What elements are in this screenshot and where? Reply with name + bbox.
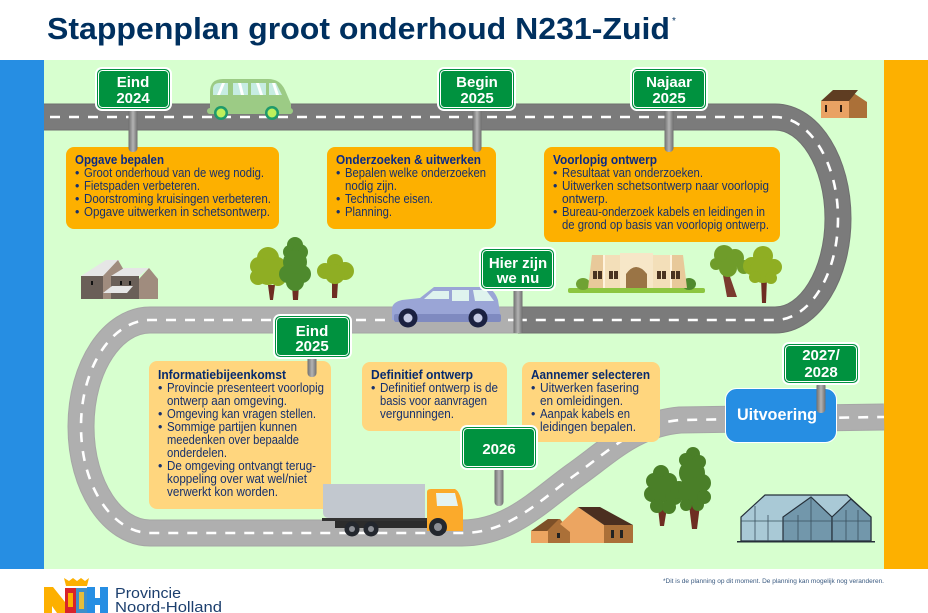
sign: najaar 2025: Najaar: [646, 74, 692, 91]
bullet list: de grond op basis van voorlopig ontwerp.: [562, 218, 769, 232]
pole: begin 2025: [472, 108, 482, 152]
sign: hier zijn we nu: [479, 247, 556, 291]
heading: Onderzoeken & uitwerken: [336, 153, 481, 167]
icon: greenhouse: [737, 495, 875, 542]
bullet list: •: [75, 179, 79, 193]
panel: uitvoering: [726, 388, 836, 442]
panel: opgave bepalen: [66, 147, 279, 229]
bullet list: basis voor aanvragen: [380, 394, 487, 408]
heading: Voorlopig ontwerp: [553, 153, 657, 167]
bullet list: [158, 381, 324, 499]
title: *: [672, 16, 676, 27]
bullet list: vergunningen.: [380, 407, 454, 421]
bullet list: De omgeving ontvangt terug-: [167, 459, 316, 473]
bullet list: [371, 381, 498, 421]
bullet list: •: [371, 381, 375, 395]
bullet list: •: [75, 192, 79, 206]
bullet list: leidingen bepalen.: [540, 420, 636, 434]
bullet list: Resultaat van onderzoeken.: [562, 166, 703, 180]
icon: bus: [207, 79, 293, 120]
bullet list: •: [553, 179, 557, 193]
logo text: Provincie: [115, 585, 181, 602]
title: Stappenplan groot onderhoud N231-Zuid: [47, 11, 670, 46]
sign: 2027/2028: [782, 342, 860, 385]
heading: Opgave bepalen: [75, 153, 164, 167]
sign: begin 2025: 2025: [460, 90, 494, 107]
bullet list: Bepalen welke onderzoeken: [345, 166, 486, 180]
bullet list: ontwerp.: [562, 192, 608, 206]
bullet list: koppeling over wat wel/niet: [167, 472, 307, 486]
heading: Informatiebijeenkomst: [158, 368, 287, 382]
bullet list: •: [158, 381, 162, 395]
bullet list: Omgeving kan vragen stellen.: [167, 407, 316, 421]
bullet list: Uitwerken fasering: [540, 381, 639, 395]
sign: eind 2025: Eind: [296, 323, 328, 340]
bullet list: •: [553, 166, 557, 180]
pole: hier zijn we nu: [514, 288, 522, 333]
bullet list: ontwerp aan omgeving.: [167, 394, 287, 408]
icon: trees left group: [250, 237, 354, 300]
icon: letter H: [87, 587, 108, 613]
bullet list: [553, 166, 769, 232]
sign: eind 2024: Eind: [117, 74, 149, 91]
panel: onderzoeken en uitwerken: [327, 147, 496, 229]
icon: house top right: [821, 90, 867, 118]
icon: house bottom: [531, 507, 633, 543]
icon: car: [392, 287, 501, 328]
bullet list: Fietspaden verbeteren.: [84, 179, 200, 193]
sign: 2027/2028: 2027/: [802, 347, 841, 364]
bullet list: meedenken over bepaalde: [167, 433, 299, 447]
bullet list: nodig zijn.: [345, 179, 397, 193]
panel: orange side bar: [884, 60, 928, 569]
bullet list: Provincie presenteert voorlopig: [167, 381, 324, 395]
bullet list: •: [158, 420, 162, 434]
bullet list: •: [75, 205, 79, 219]
icon: trees bottom right: [644, 447, 711, 529]
bullet list: en omleidingen.: [540, 394, 623, 408]
sign: eind 2025: [273, 314, 352, 359]
panel: aannemer selecteren: [522, 362, 660, 442]
sign: eind 2025: 2025: [295, 338, 329, 355]
road: upcoming light section: [81, 320, 884, 533]
bullet list: [336, 166, 486, 219]
bullet list: Doorstroming kruisingen verbeteren.: [84, 192, 271, 206]
icon: grey farm house: [81, 260, 158, 299]
sign: 2026: [460, 425, 538, 470]
icon: letter N: [44, 587, 65, 613]
bullet list: verwerkt kon worden.: [167, 485, 278, 499]
bullet list: Uitwerken schetsontwerp naar voorlopig: [562, 179, 769, 193]
bullet list: Planning.: [345, 205, 392, 219]
footnote: *Dit is de planning op dit moment. De planning kan mogelijk nog veranderen.: [663, 578, 884, 585]
sign: najaar 2025: [630, 67, 708, 111]
bullet list: Technische eisen.: [345, 192, 433, 206]
panel: informatiebijeenkomst: [149, 361, 331, 509]
icon: crown: [64, 578, 89, 586]
bullet list: onderdelen.: [167, 446, 227, 460]
sign: hier zijn we nu: Hier zijn: [489, 255, 547, 272]
heading: Aannemer selecteren: [531, 368, 650, 382]
bullet list: •: [531, 407, 535, 421]
sign: eind 2024: [95, 67, 172, 111]
sign: hier zijn we nu: we nu: [496, 270, 539, 287]
sign: eind 2024: 2024: [116, 90, 150, 107]
bullet list: •: [336, 192, 340, 206]
sign: 2026: 2026: [482, 441, 516, 458]
pole: 2026: [494, 467, 504, 506]
panel: uitvoering: Uitvoering: [737, 406, 817, 424]
sign: 2027/2028: 2028: [804, 364, 838, 381]
bullet list: Sommige partijen kunnen: [167, 420, 297, 434]
bullet list: Aanpak kabels en: [540, 407, 630, 421]
bullet list: •: [553, 205, 557, 219]
road: completed dark section: [44, 117, 838, 320]
bullet list: [75, 166, 271, 219]
icon: castle: [568, 253, 705, 293]
icon: shield: [65, 588, 87, 613]
bullet list: •: [336, 166, 340, 180]
bullet list: •: [158, 407, 162, 421]
bullet list: [531, 381, 639, 434]
pole: eind 2024: [128, 108, 138, 152]
icon: trees right group: [710, 245, 782, 303]
sign: begin 2025: Begin: [456, 74, 498, 91]
bullet list: •: [336, 205, 340, 219]
panel: green landscape background: [44, 60, 884, 569]
logo: Provincie Noord-Holland: [44, 578, 222, 613]
panel: voorlopig ontwerp: [544, 147, 780, 242]
panel: definitief ontwerp: [362, 362, 507, 431]
sign: begin 2025: [437, 67, 516, 111]
heading: Definitief ontwerp: [371, 368, 473, 382]
bullet list: •: [158, 459, 162, 473]
bullet list: Definitief ontwerp is de: [380, 381, 498, 395]
bullet list: •: [531, 381, 535, 395]
panel: blue side bar: [0, 60, 44, 569]
pole: najaar 2025: [664, 108, 674, 152]
pole: 2027/2028: [816, 382, 826, 413]
bullet list: •: [75, 166, 79, 180]
pole: eind 2025: [308, 355, 316, 377]
icon: truck: [322, 484, 463, 536]
sign: najaar 2025: 2025: [652, 90, 686, 107]
bullet list: Bureau-onderzoek kabels en leidingen in: [562, 205, 765, 219]
bullet list: Opgave uitwerken in schetsontwerp.: [84, 205, 270, 219]
bullet list: Groot onderhoud van de weg nodig.: [84, 166, 264, 180]
